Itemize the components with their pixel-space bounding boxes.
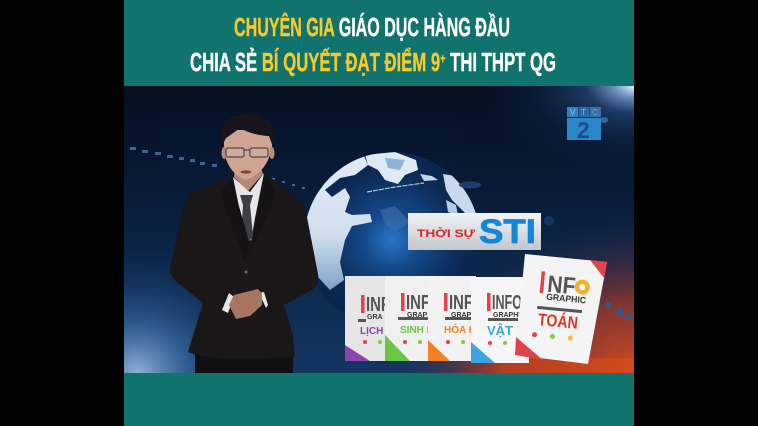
jacket — [170, 174, 318, 359]
red glow bottom right — [515, 235, 634, 358]
book: Vật lý: INFO — [492, 292, 522, 314]
book: Lịch sử: LỊCH — [360, 326, 383, 337]
tie — [240, 195, 253, 244]
hands — [229, 289, 262, 319]
book: Hóa học: HÓA H — [444, 323, 476, 336]
jacket button — [244, 270, 248, 274]
neck — [234, 170, 263, 191]
mouth — [240, 170, 252, 174]
book: Hóa học: GRAP — [451, 312, 472, 319]
book: Hóa học — [428, 276, 476, 361]
studio background — [124, 86, 634, 373]
shirt cuffs — [222, 292, 268, 313]
continent: top mass — [365, 152, 418, 184]
continent: shaded top — [385, 158, 405, 170]
presenter — [170, 113, 318, 373]
globe — [307, 152, 476, 314]
news studio scene — [124, 86, 634, 373]
book stack — [345, 254, 607, 364]
VTC2 logo — [567, 107, 601, 143]
side bar left — [0, 0, 124, 426]
legs — [195, 354, 293, 373]
VTC2 logo: V — [570, 108, 576, 117]
coast line — [367, 183, 424, 192]
glasses — [226, 148, 268, 157]
book: Toán: TOÁN — [537, 310, 579, 333]
lapel shadows — [238, 174, 266, 244]
book: Lịch sử — [345, 276, 390, 361]
blue dots right — [604, 302, 632, 320]
dotted arc — [130, 147, 305, 189]
header band — [124, 0, 634, 86]
Thoi su STI plate — [408, 213, 541, 251]
title line 1: CHUYÊN GIA GIÁO DỤC HÀNG ĐẦU — [234, 12, 510, 42]
corner flare bottom left — [124, 274, 202, 373]
shirt — [233, 173, 264, 241]
VTC2 logo: T — [581, 108, 586, 117]
hair — [221, 113, 274, 147]
book: Lịch sử: GRA — [367, 314, 383, 321]
footer band — [124, 373, 634, 426]
book: Vật lý: VẬT L — [487, 323, 525, 338]
background dot grid — [160, 95, 460, 205]
infographic canvas — [124, 0, 634, 426]
book: Vật lý — [471, 277, 529, 363]
book: Sinh học — [385, 276, 434, 361]
book: Toán: NF — [546, 271, 577, 300]
title line 2: + — [440, 50, 445, 66]
lens glow near globe — [459, 182, 481, 188]
corner flare top right — [506, 86, 634, 152]
continent: left mass — [304, 156, 372, 290]
head — [224, 130, 272, 180]
continent: lower right — [446, 200, 458, 213]
lens glow upper right — [601, 117, 608, 123]
book: Toán: GRAPHIC — [546, 292, 587, 306]
book: Toán — [515, 254, 607, 364]
Thoi su STI plate: STI — [479, 213, 536, 251]
book: Sinh học: GRAP — [407, 312, 428, 319]
lens glow beside plate — [544, 216, 554, 226]
title — [190, 12, 556, 77]
book: Hóa học: INF — [449, 292, 473, 314]
continent: right strip — [443, 174, 476, 213]
title line 2: THI THPT QG — [445, 47, 556, 77]
book: Lịch sử: INF — [366, 294, 390, 316]
book: Vật lý: GRAPHI — [493, 312, 520, 319]
book: Sinh học: INF — [406, 292, 430, 314]
title line 2: CHIA SẺ BÍ QUYẾT ĐẠT ĐIỂM 9 — [190, 47, 539, 77]
orange floor strip — [400, 358, 634, 373]
VTC2 logo: C — [592, 108, 598, 117]
continent: lower scatter — [380, 206, 410, 232]
ears — [222, 147, 226, 159]
VTC2 logo: 2 — [577, 117, 590, 143]
continent: small island — [420, 174, 438, 181]
side bar right — [634, 0, 758, 426]
book: Sinh học: SINH H — [400, 325, 434, 336]
Thoi su STI plate: THỜI SỰ — [417, 227, 476, 240]
